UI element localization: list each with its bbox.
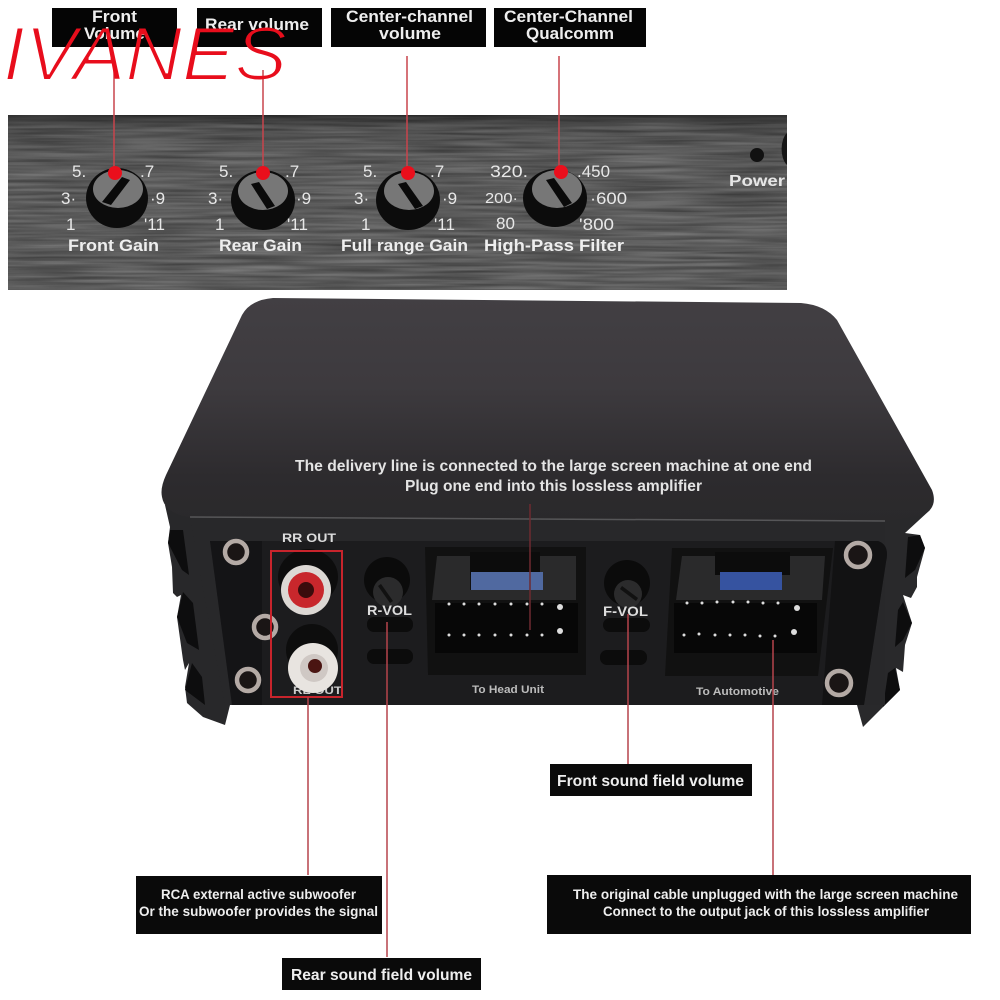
label: center-channel qualcomm [494, 8, 646, 47]
RCA jack upper [278, 549, 338, 615]
label: RCA subwoofer: Or the subwoofer provides the signal [139, 904, 378, 919]
panel: knob photo strip [8, 115, 787, 290]
RCA jack lower [286, 624, 342, 697]
label: front volume [52, 8, 177, 47]
knob: rear gain: .7 [285, 162, 299, 181]
knob: front gain [61, 162, 165, 255]
head unit connector [425, 547, 586, 696]
label: original cable: The original cable unplugged with the large screen machine [573, 887, 958, 902]
front volume knob [600, 560, 650, 665]
label: front volume: Front [92, 8, 138, 26]
label: center-channel volume [331, 8, 486, 47]
knob: front gain: ·9 [150, 189, 165, 208]
amplifier left pillar and fins [165, 505, 240, 725]
RCA jack lower: RL OUT [293, 685, 342, 697]
label: RCA subwoofer [136, 876, 382, 934]
delivery line annotation: The delivery line is connected to the large screen machine at one end [295, 458, 812, 475]
knob: high-pass filter: ·600 [590, 189, 627, 208]
label: front sound field volume: Front sound field volume [557, 773, 744, 790]
knob: full range gain: .7 [430, 162, 444, 181]
delivery line annotation [295, 458, 812, 495]
knob: high-pass filter: 80 [496, 214, 515, 233]
front volume knob: F-VOL [603, 603, 648, 619]
knob: high-pass filter: 200· [485, 190, 518, 207]
amplifier top cover [162, 298, 934, 521]
knob: full range gain: 3· [354, 189, 369, 208]
knob: rear gain [208, 162, 311, 255]
label: center-channel volume: Center-channel [346, 8, 473, 26]
knob: full range gain: Full range Gain [341, 237, 468, 255]
arrow: top callout leaders [108, 56, 568, 180]
hex screws [225, 541, 870, 695]
knob: high-pass filter: '800 [579, 215, 614, 234]
knob: rear gain: '11 [287, 215, 308, 234]
knob: front gain: 5. [72, 162, 86, 181]
knob: front gain: .7 [140, 162, 154, 181]
amplifier front face [190, 517, 887, 705]
head unit connector: To Head Unit [472, 684, 544, 696]
label: original cable [547, 875, 971, 934]
knob: front gain: '11 [144, 215, 165, 234]
label: center-channel qualcomm: Qualcomm [526, 25, 614, 43]
arrow: photo callout leaders [308, 504, 773, 957]
panel: amplifier photo [162, 298, 934, 727]
knob: front gain: 3· [61, 189, 76, 208]
label: RCA subwoofer: RCA external active subwoofer [161, 887, 357, 902]
knob: front gain: 1 [66, 215, 75, 234]
automotive connector: To Automotive [696, 686, 779, 698]
label: original cable: Connect to the output jack of this lossless amplifier [603, 904, 930, 919]
label: rear sound field volume [282, 958, 481, 990]
knob: full range gain [341, 162, 468, 255]
knob: high-pass filter [484, 162, 627, 255]
knob: full range gain: 5. [363, 162, 377, 181]
knob: full range gain: ·9 [442, 189, 457, 208]
label: rear sound field volume: Rear sound field volume [291, 967, 472, 984]
label: front sound field volume [550, 764, 752, 796]
watermark: IVANES: IVANES [3, 12, 287, 97]
knob: full range gain: 1 [361, 215, 370, 234]
knob: rear gain: ·9 [296, 189, 311, 208]
knob: rear gain: 3· [208, 189, 223, 208]
RR OUT label: RR OUT [282, 531, 337, 545]
delivery line annotation: Plug one end into this lossless amplifier [405, 478, 702, 495]
rear volume knob [364, 557, 413, 664]
rear volume knob: R-VOL [367, 602, 412, 618]
label: center-channel volume: volume [379, 25, 441, 43]
power indicator [729, 133, 787, 190]
label: front volume: Volume [84, 25, 145, 43]
label: rear volume [197, 8, 322, 47]
knob: high-pass filter: .450 [577, 162, 610, 181]
power indicator: Power [729, 173, 785, 190]
knob: rear gain: 1 [215, 215, 224, 234]
label: center-channel qualcomm: Center-Channel [504, 8, 633, 26]
knob: rear gain: 5. [219, 162, 233, 181]
RCA highlight frame [271, 551, 342, 697]
knob: high-pass filter: 320. [490, 162, 528, 181]
knob: rear gain: Rear Gain [219, 237, 302, 255]
knob: front gain: Front Gain [68, 237, 159, 255]
knob: high-pass filter: High-Pass Filter [484, 237, 625, 255]
knob: full range gain: '11 [434, 215, 455, 234]
automotive connector [665, 548, 833, 698]
amplifier right pillar and fins [840, 510, 930, 727]
label: rear volume: Rear volume [205, 16, 309, 34]
